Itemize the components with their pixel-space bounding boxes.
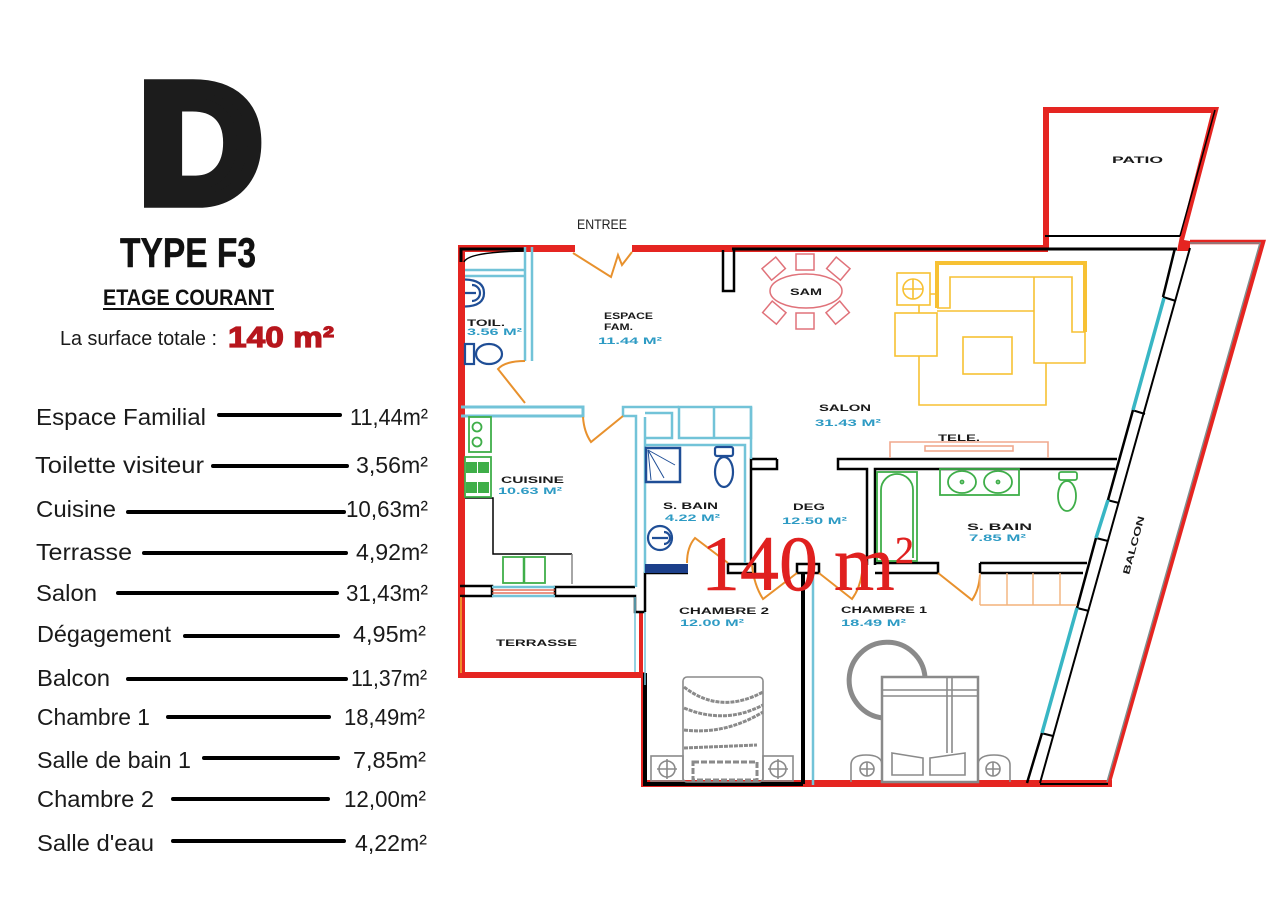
total surface: 140 m² xyxy=(228,322,334,354)
row: Balcon: 11,37m² xyxy=(351,665,427,691)
row: Dégagement xyxy=(37,621,426,647)
row: Salon: Salon xyxy=(36,580,97,606)
television unit xyxy=(890,442,1048,458)
interior black walls xyxy=(460,110,1215,784)
room labels: CUISINE xyxy=(501,475,564,486)
row: Salle de bain 1: Salle de bain 1 xyxy=(37,747,191,773)
navy wall segment xyxy=(645,564,688,573)
room labels: 18.49 M² xyxy=(841,618,906,629)
row: Salon xyxy=(36,580,428,606)
room labels: DEG xyxy=(793,502,825,513)
grey partition xyxy=(571,554,573,584)
row: Toilette visiteur xyxy=(35,452,428,478)
room labels: 12.00 M² xyxy=(680,618,744,629)
row: Salle de bain 1 xyxy=(37,747,426,773)
room labels: SALON xyxy=(819,403,871,414)
bed: bedroom 2 xyxy=(651,677,793,782)
room labels: TELE. xyxy=(938,433,980,444)
room labels: 11.44 M² xyxy=(598,336,662,347)
row: Cuisine: Cuisine xyxy=(36,496,116,522)
outer red walls xyxy=(458,107,1219,787)
overlay: total area: 140 xyxy=(701,520,818,607)
overlay: total area xyxy=(701,520,914,607)
row: Balcon: Balcon xyxy=(37,665,110,691)
overlay: total area: 2 xyxy=(895,530,914,572)
window accents xyxy=(461,590,555,673)
row: Salon: 31,43m² xyxy=(346,580,428,606)
room labels: TOIL. xyxy=(467,318,505,329)
kitchen fixtures xyxy=(465,417,545,583)
diagonal wall and windows xyxy=(1027,248,1190,783)
doors xyxy=(498,252,980,600)
small bathroom fixtures xyxy=(646,447,733,550)
floor plan xyxy=(458,107,1263,787)
row: Chambre 1: Chambre 1 xyxy=(37,704,150,730)
row: Toilette visiteur: Toilette visiteur xyxy=(35,452,204,478)
room labels: PATIO xyxy=(1112,155,1163,166)
row: Espace Familial: 11,44m² xyxy=(350,404,428,430)
row: Balcon xyxy=(37,665,427,691)
overlay: total area: m xyxy=(834,520,895,607)
balcony outline xyxy=(1107,242,1263,785)
room labels: ENTREE xyxy=(577,216,627,232)
list: room areas xyxy=(35,404,428,856)
room labels: CHAMBRE 1 xyxy=(841,605,928,616)
room labels: 7.85 M² xyxy=(969,533,1026,544)
row: Espace Familial: Espace Familial xyxy=(36,404,206,430)
room labels: BALCON xyxy=(1121,515,1147,576)
room labels: 31.43 M² xyxy=(815,418,881,429)
total surface xyxy=(60,322,334,354)
room labels: 10.63 M² xyxy=(498,486,562,497)
room labels: S. BAIN xyxy=(663,501,718,512)
row: Chambre 2: Chambre 2 xyxy=(37,786,154,812)
total surface: La surface totale : xyxy=(60,328,217,350)
row: Terrasse: Terrasse xyxy=(36,539,132,565)
row: Terrasse: 4,92m² xyxy=(356,539,428,565)
row: Cuisine: 10,63m² xyxy=(346,496,428,522)
cyan walls xyxy=(461,247,813,785)
wardrobe xyxy=(980,573,1077,605)
room labels: S. BAIN xyxy=(967,522,1032,533)
row: Chambre 1: 18,49m² xyxy=(344,704,425,730)
living room furniture xyxy=(895,263,1085,405)
row: Espace Familial xyxy=(36,404,428,430)
row: Salle d'eau: 4,22m² xyxy=(355,830,427,856)
main bathroom fixtures xyxy=(877,469,1077,561)
room labels: SAM xyxy=(790,287,822,298)
row: Chambre 2: 12,00m² xyxy=(344,786,426,812)
heading: type: TYPE F3 xyxy=(120,229,256,276)
room labels: 12.50 M² xyxy=(782,516,847,527)
room labels: TERRASSE xyxy=(496,638,577,649)
room labels: 3.56 M² xyxy=(467,327,522,338)
room labels xyxy=(467,155,1163,649)
panel: summary xyxy=(35,51,428,856)
row: Salle d'eau xyxy=(37,830,427,856)
bed: bedroom 1 xyxy=(849,642,1010,782)
row: Dégagement: 4,95m² xyxy=(353,621,426,647)
room labels: CHAMBRE 2 xyxy=(679,606,769,617)
row: Chambre 2 xyxy=(37,786,426,812)
dining table xyxy=(762,254,850,329)
row: Chambre 1 xyxy=(37,704,425,730)
room labels: 4.22 M² xyxy=(665,513,720,524)
row: Salle de bain 1: 7,85m² xyxy=(353,747,426,773)
room labels: ESPACE xyxy=(604,311,653,322)
row: Cuisine xyxy=(36,496,428,522)
row: Toilette visiteur: 3,56m² xyxy=(356,452,428,478)
big letter D: D xyxy=(140,51,262,237)
room labels: FAM. xyxy=(604,322,633,333)
guest toilet fixtures xyxy=(465,280,502,364)
row: Salle d'eau: Salle d'eau xyxy=(37,830,154,856)
subheading: floor: ETAGE COURANT xyxy=(103,285,274,310)
row: Terrasse xyxy=(36,539,428,565)
row: Dégagement: Dégagement xyxy=(37,621,172,647)
